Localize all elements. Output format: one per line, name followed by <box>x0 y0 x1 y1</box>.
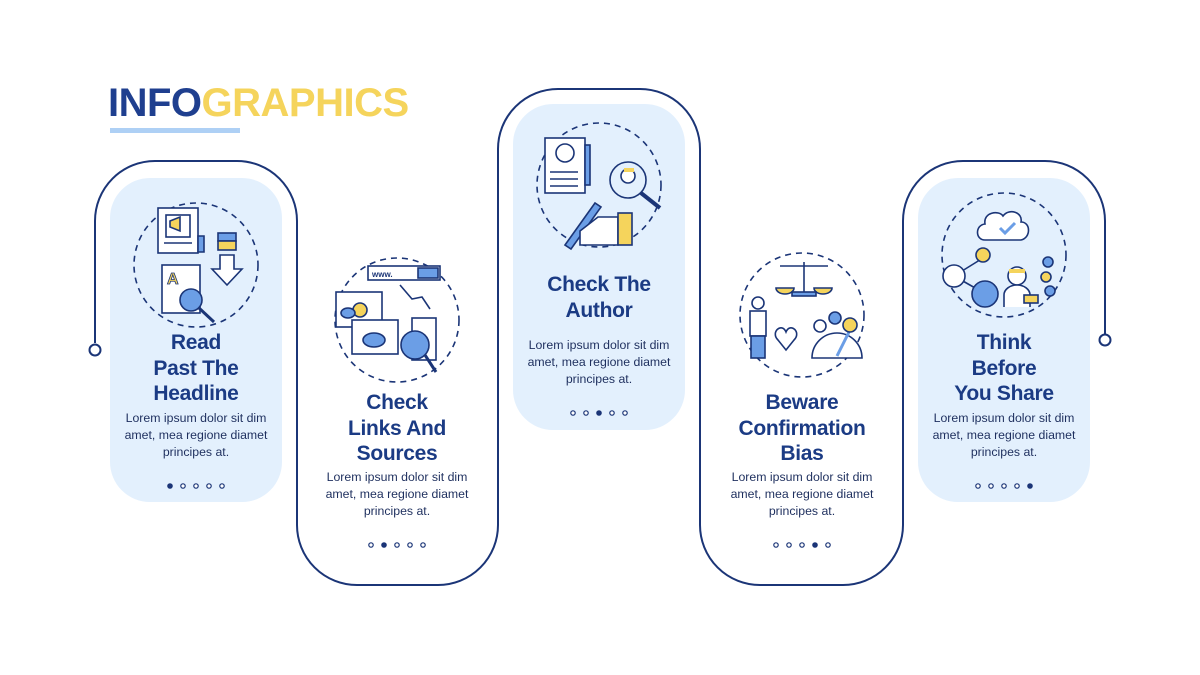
text: card 1: amet, mea regione diamet <box>125 428 267 442</box>
icon: think before share <box>942 193 1066 317</box>
heading: think before share: You Share <box>954 382 1054 405</box>
pagination dots <box>168 411 1032 547</box>
text: card 4: amet, mea regione diamet <box>731 487 873 501</box>
text: card 2: amet, mea regione diamet <box>326 487 468 501</box>
heading: confirmation bias <box>738 391 866 465</box>
icon: links sources: www. <box>371 270 393 279</box>
text: card 5: amet, mea regione diamet <box>933 428 1075 442</box>
icon: read headline <box>134 203 258 327</box>
heading: read past the headline <box>153 331 239 405</box>
heading: check author: Author <box>565 298 632 322</box>
heading: think before share <box>954 331 1054 405</box>
text: card 2 <box>326 470 468 518</box>
title: INFOGRAPHICS <box>108 81 409 125</box>
text: card 4: Lorem ipsum dolor sit dim <box>732 470 872 484</box>
text: card 1: Lorem ipsum dolor sit dim <box>126 411 266 425</box>
text: card 5: principes at. <box>971 445 1037 459</box>
text: card 3: Lorem ipsum dolor sit dim <box>529 338 669 352</box>
text: card 3 <box>528 338 670 386</box>
text: card 3: amet, mea regione diamet <box>528 355 670 369</box>
outline path <box>95 89 1105 585</box>
text: card 4 <box>731 470 874 518</box>
heading: read past the headline: Headline <box>153 382 239 405</box>
heading: check links: Check <box>366 391 428 414</box>
heading: think before share: Think <box>977 331 1031 354</box>
heading: check links: Sources <box>357 442 437 465</box>
heading: read past the headline: Past The <box>153 356 239 380</box>
text: card 5 <box>933 411 1076 459</box>
heading: think before share: Before <box>972 356 1036 380</box>
heading: confirmation bias: Bias <box>780 442 824 465</box>
panel fills <box>110 104 1090 502</box>
heading: check links: Links And <box>348 416 446 440</box>
end dots <box>90 334 1110 356</box>
text: card 5: Lorem ipsum dolor sit dim <box>934 411 1074 425</box>
heading: read past the headline: Read <box>171 331 221 354</box>
heading: check author <box>547 273 651 322</box>
heading: confirmation bias: Beware <box>766 391 838 414</box>
heading: check links <box>348 391 446 465</box>
icon: links sources <box>335 258 459 382</box>
text: card 3: principes at. <box>566 372 632 386</box>
text: card 2: Lorem ipsum dolor sit dim <box>327 470 467 484</box>
icon: author <box>537 123 661 249</box>
icon: confirmation bias <box>740 253 864 377</box>
heading: check author: Check The <box>547 273 651 296</box>
text: card 1: principes at. <box>163 445 229 459</box>
title underline <box>110 128 240 133</box>
text: card 4: principes at. <box>769 504 835 518</box>
text: card 1 <box>125 411 268 459</box>
heading: confirmation bias: Confirmation <box>738 416 866 440</box>
icon: read headline: A <box>167 271 179 288</box>
text: card 2: principes at. <box>364 504 430 518</box>
